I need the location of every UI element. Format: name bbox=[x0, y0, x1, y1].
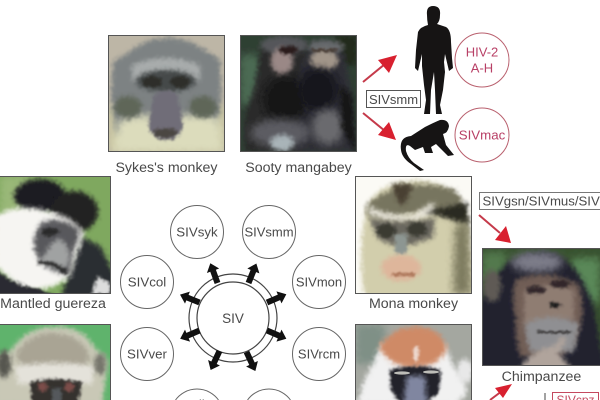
icon: macaque silhouette bbox=[401, 120, 454, 171]
circle: SIVsyk bbox=[170, 206, 224, 258]
label: Chimpanzee: Chimpanzee bbox=[502, 369, 581, 385]
virus outer ring bbox=[189, 274, 277, 362]
circle: SIVmon: SIVmon bbox=[296, 274, 342, 290]
label: Mantled guereza: Mantled guereza bbox=[0, 296, 106, 312]
circle: SIVcol: SIVcol bbox=[128, 274, 166, 290]
circle: SIVsyk: SIVsyk bbox=[176, 224, 218, 240]
photo: Mantled guereza bbox=[0, 171, 116, 299]
photo: Red-capped mangabey bbox=[350, 319, 477, 400]
arrow: to chimpanzee from above bbox=[479, 215, 511, 243]
label: Mona monkey: Mona monkey bbox=[369, 296, 459, 312]
label box: SIVgsn/SIVmus/SIVmon: SIVgsn/SIVmus/SIV bbox=[482, 194, 600, 208]
label: SIV: SIV bbox=[222, 311, 244, 326]
circle: HIV-2 A-H: A-H bbox=[471, 60, 493, 76]
label: Sooty mangabey: Sooty mangabey bbox=[245, 160, 353, 176]
circle: HIV-2 A-H bbox=[455, 33, 509, 87]
photo: Chimpanzee bbox=[477, 243, 600, 371]
circle: SIVrcm: SIVrcm bbox=[298, 346, 340, 362]
spike arrows bbox=[178, 261, 289, 374]
icon: human silhouette bbox=[415, 6, 453, 114]
circle: SIVsmm bbox=[242, 206, 296, 258]
circle: SIVmac: SIVmac bbox=[459, 128, 506, 142]
photo: Vervet monkey bbox=[0, 319, 116, 400]
circle: SIVmac bbox=[455, 108, 509, 162]
circle: SIVver bbox=[120, 328, 174, 380]
arrow: to macaque bbox=[363, 113, 396, 140]
photo: Mona monkey bbox=[350, 171, 477, 299]
photo: Sooty mangabey bbox=[235, 30, 362, 157]
circle: SIVcol bbox=[120, 256, 174, 308]
arrow: to human bbox=[363, 55, 397, 82]
diagram: SIV virus hub bbox=[178, 261, 289, 374]
photo: Sykes's monkey bbox=[103, 30, 230, 157]
circle: HIV-2 A-H: HIV-2 bbox=[466, 44, 498, 60]
circle: SIVsmm: SIVsmm bbox=[244, 224, 294, 240]
circle: SIVmon bbox=[292, 256, 346, 308]
circle: SIVver: SIVver bbox=[127, 346, 168, 362]
arrow: to chimpanzee from below bbox=[490, 384, 512, 400]
connector line bbox=[544, 393, 546, 400]
circle: cropped bottom right bbox=[248, 389, 290, 400]
virus inner ring bbox=[197, 282, 269, 354]
circle: cropped bottom left bbox=[176, 389, 218, 400]
label box: SIVsmm: SIVsmm bbox=[369, 92, 418, 107]
label: Sykes's monkey: Sykes's monkey bbox=[115, 160, 218, 176]
circle: SIVrcm bbox=[292, 328, 346, 380]
